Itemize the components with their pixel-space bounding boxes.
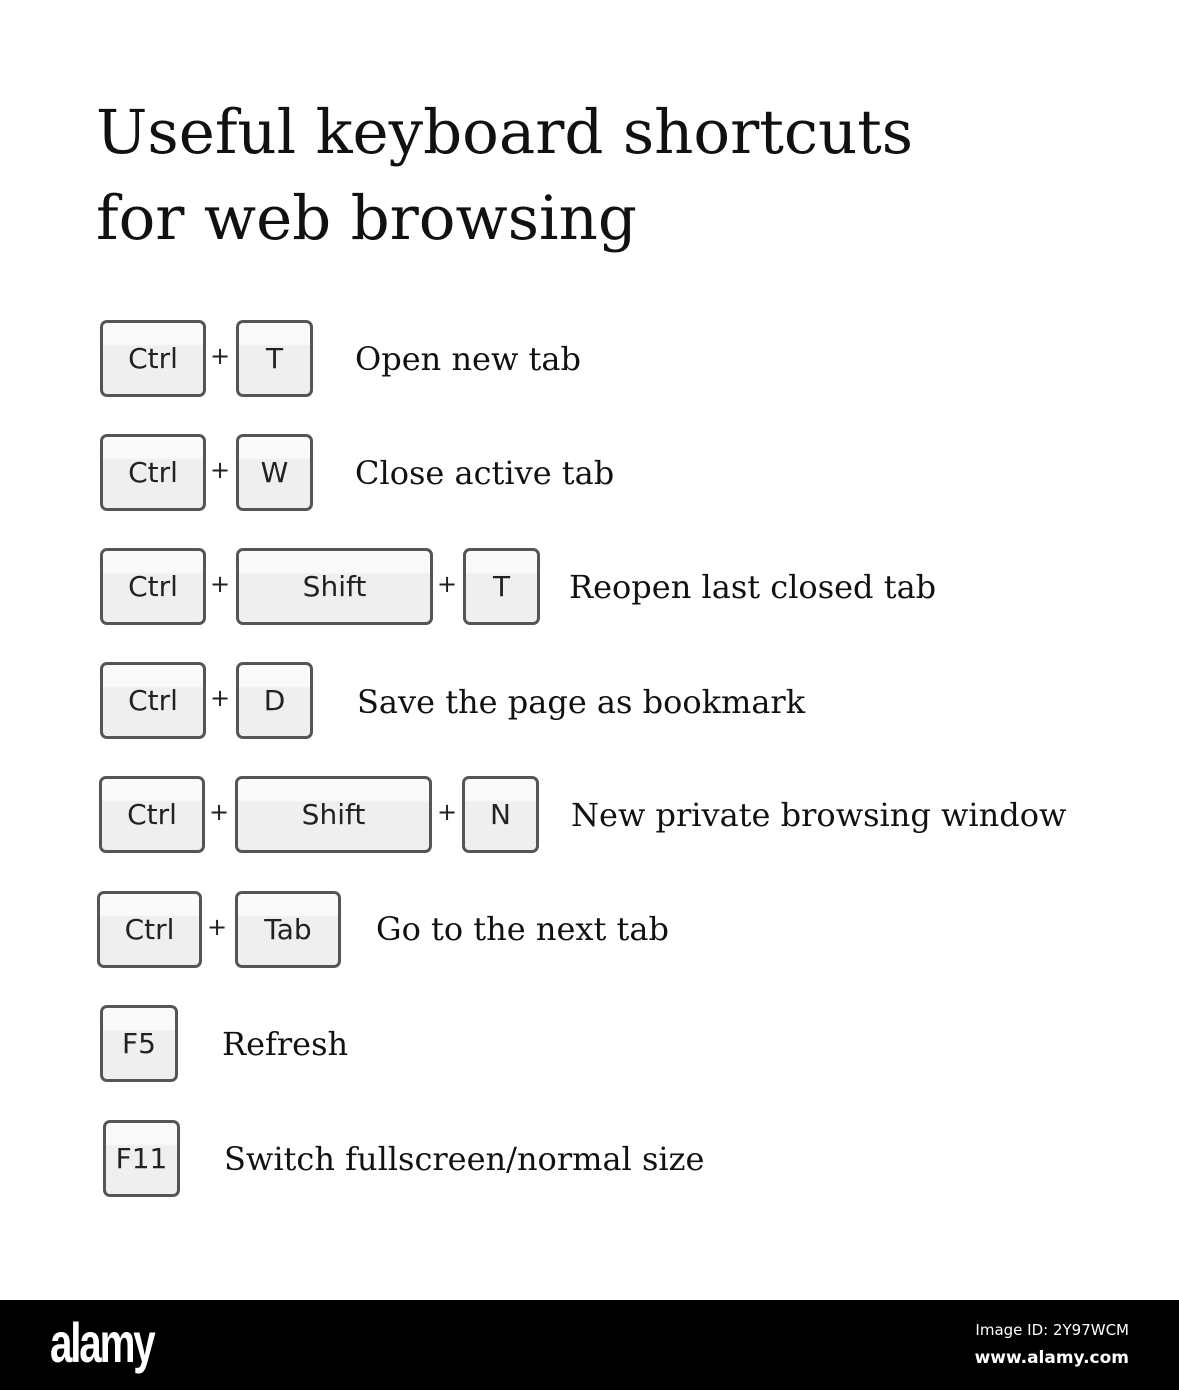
text: Ctrl bbox=[128, 570, 178, 603]
text: Switch fullscreen/normal size bbox=[224, 1140, 704, 1178]
row: ctrl shift n bbox=[99, 776, 1066, 853]
text: Tab bbox=[264, 913, 312, 946]
text: F5 bbox=[122, 1027, 156, 1060]
logo: alamy bbox=[50, 1311, 154, 1374]
row: ctrl d bbox=[100, 662, 806, 739]
row: ctrl tab bbox=[97, 891, 669, 968]
text: Ctrl bbox=[128, 342, 178, 375]
text: F11 bbox=[116, 1142, 167, 1175]
row: f11 bbox=[103, 1120, 704, 1197]
text: + bbox=[207, 913, 227, 941]
title bbox=[96, 97, 913, 254]
text: Close active tab bbox=[355, 454, 614, 492]
text: + bbox=[209, 798, 229, 826]
text: Shift bbox=[303, 570, 366, 603]
text: W bbox=[261, 456, 288, 489]
text: Go to the next tab bbox=[376, 910, 669, 948]
text: Open new tab bbox=[355, 340, 581, 378]
text: + bbox=[210, 570, 230, 598]
text: N bbox=[490, 798, 511, 831]
text: Ctrl bbox=[127, 798, 177, 831]
text: New private browsing window bbox=[571, 796, 1066, 834]
title: Useful keyboard shortcuts bbox=[96, 97, 913, 168]
title: for web browsing bbox=[96, 183, 637, 254]
text: + bbox=[210, 684, 230, 712]
footer bar bbox=[0, 1300, 1179, 1390]
text: + bbox=[437, 798, 457, 826]
text: Ctrl bbox=[125, 913, 174, 946]
row: ctrl w bbox=[100, 434, 614, 511]
text: Ctrl bbox=[128, 456, 178, 489]
text: + bbox=[210, 456, 230, 484]
text: + bbox=[437, 570, 457, 598]
row: ctrl t bbox=[100, 320, 581, 397]
text: Save the page as bookmark bbox=[357, 683, 805, 721]
text: D bbox=[264, 684, 285, 717]
text: Refresh bbox=[222, 1025, 348, 1063]
text: T bbox=[266, 342, 283, 375]
image id: Image ID: 2Y97WCM bbox=[975, 1321, 1129, 1339]
text: Reopen last closed tab bbox=[569, 568, 936, 606]
text: + bbox=[210, 342, 230, 370]
image id bbox=[975, 1321, 1129, 1368]
text: T bbox=[493, 570, 510, 603]
text: Shift bbox=[302, 798, 365, 831]
text: Ctrl bbox=[128, 684, 178, 717]
image id: www.alamy.com bbox=[975, 1348, 1129, 1368]
row: ctrl shift t bbox=[100, 548, 936, 625]
row: f5 bbox=[100, 1005, 348, 1082]
